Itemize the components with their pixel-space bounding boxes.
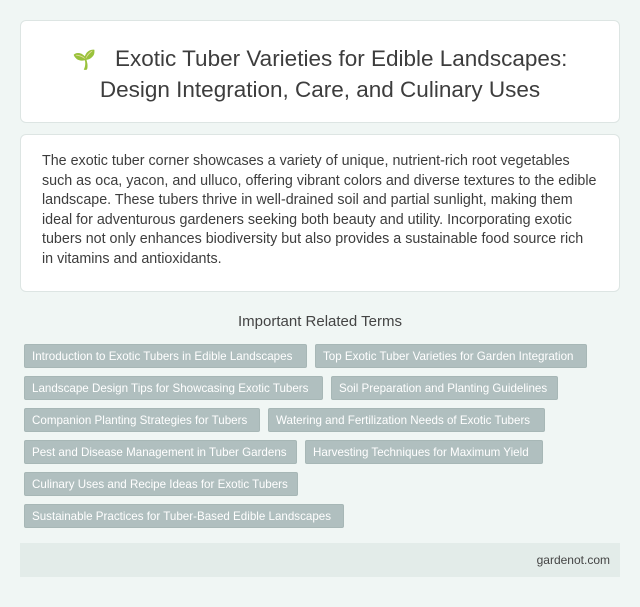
tag 8: Harvesting Techniques for Maximum Yield [313, 446, 529, 459]
description text: such as oca, yacon, and ulluco, offering vibrant colors and diverse textures to the edible [42, 173, 596, 189]
footer [20, 543, 620, 577]
title: Design Integration, Care, and Culinary Uses [100, 77, 540, 102]
tag 9: Culinary Uses and Recipe Ideas for Exotic Tubers [32, 478, 288, 491]
description text: landscape. These tubers thrive in well-drained soil and partial sunlight, making them [42, 192, 573, 208]
tag 1 [24, 344, 307, 368]
tag 10: Sustainable Practices for Tuber-Based Edible Landscapes [32, 510, 331, 523]
title: 🌱 Exotic Tuber Varieties for Edible Landscapes: [73, 46, 567, 71]
tag 5 [24, 408, 260, 432]
tag 6: Watering and Fertilization Needs of Exotic Tubers [276, 414, 530, 427]
tag 9 [24, 472, 298, 496]
tag 2: Top Exotic Tuber Varieties for Garden Integration [323, 350, 573, 363]
tag 1: Introduction to Exotic Tubers in Edible Landscapes [32, 350, 292, 363]
description text: tubers not only enhances biodiversity but also provides a sustainable food source rich [42, 231, 583, 247]
description text: ideal for adventurous gardeners seeking both beauty and utility. Incorporating exotic [42, 212, 572, 228]
tag 8 [305, 440, 543, 464]
tag 3: Landscape Design Tips for Showcasing Exotic Tubers [32, 382, 308, 395]
title panel [20, 20, 620, 123]
related terms heading: Important Related Terms [238, 313, 402, 330]
tag 5: Companion Planting Strategies for Tubers [32, 414, 247, 427]
tag 7 [24, 440, 297, 464]
tag 4 [331, 376, 558, 400]
description text: in vitamins and antioxidants. [42, 251, 222, 267]
description text: The exotic tuber corner showcases a variety of unique, nutrient-rich root vegetables [42, 153, 570, 169]
tag 7: Pest and Disease Management in Tuber Gardens [32, 446, 287, 459]
tag 3 [24, 376, 323, 400]
description text [42, 153, 596, 267]
footer credit: gardenot.com [537, 553, 610, 567]
tag 10 [24, 504, 344, 528]
title [73, 46, 567, 102]
description panel [20, 134, 620, 292]
tag 6 [268, 408, 545, 432]
tag 4: Soil Preparation and Planting Guidelines [339, 382, 547, 395]
tag 2 [315, 344, 587, 368]
